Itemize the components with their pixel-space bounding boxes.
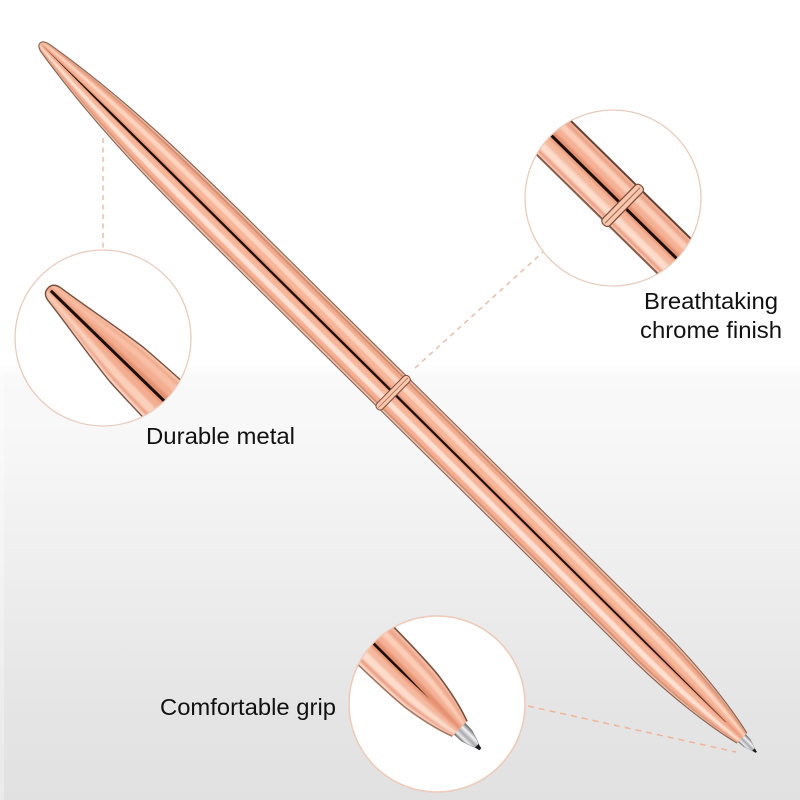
label: comfortable grip: Comfortable grip xyxy=(160,694,336,720)
circle: comfortable grip xyxy=(349,616,525,792)
edges xyxy=(44,284,180,416)
edges xyxy=(536,120,691,274)
ring xyxy=(600,183,645,228)
leader line: comfortable grip xyxy=(528,706,736,752)
pen barrel close-up xyxy=(536,120,691,274)
pen nose close-up xyxy=(44,284,180,416)
edges xyxy=(358,627,468,737)
centre highlight line xyxy=(42,45,727,723)
pen tip close-up xyxy=(358,627,482,750)
pen nib xyxy=(737,733,760,756)
panel: durable metal detail xyxy=(14,249,192,427)
left margin strip xyxy=(0,370,4,800)
circle: chrome finish xyxy=(525,110,701,286)
panel: comfortable grip detail xyxy=(348,615,526,793)
circle: durable metal xyxy=(15,250,191,426)
label: durable metal: Durable metal xyxy=(146,423,295,449)
label: chrome finish: Breathtaking xyxy=(644,288,778,314)
label: chrome finish line 2: chrome finish xyxy=(640,317,782,343)
leader line: durable metal xyxy=(102,138,104,250)
silver nib xyxy=(454,723,482,750)
ring xyxy=(374,374,412,412)
panel: chrome finish detail xyxy=(524,109,702,287)
leader line: chrome finish xyxy=(415,252,543,368)
